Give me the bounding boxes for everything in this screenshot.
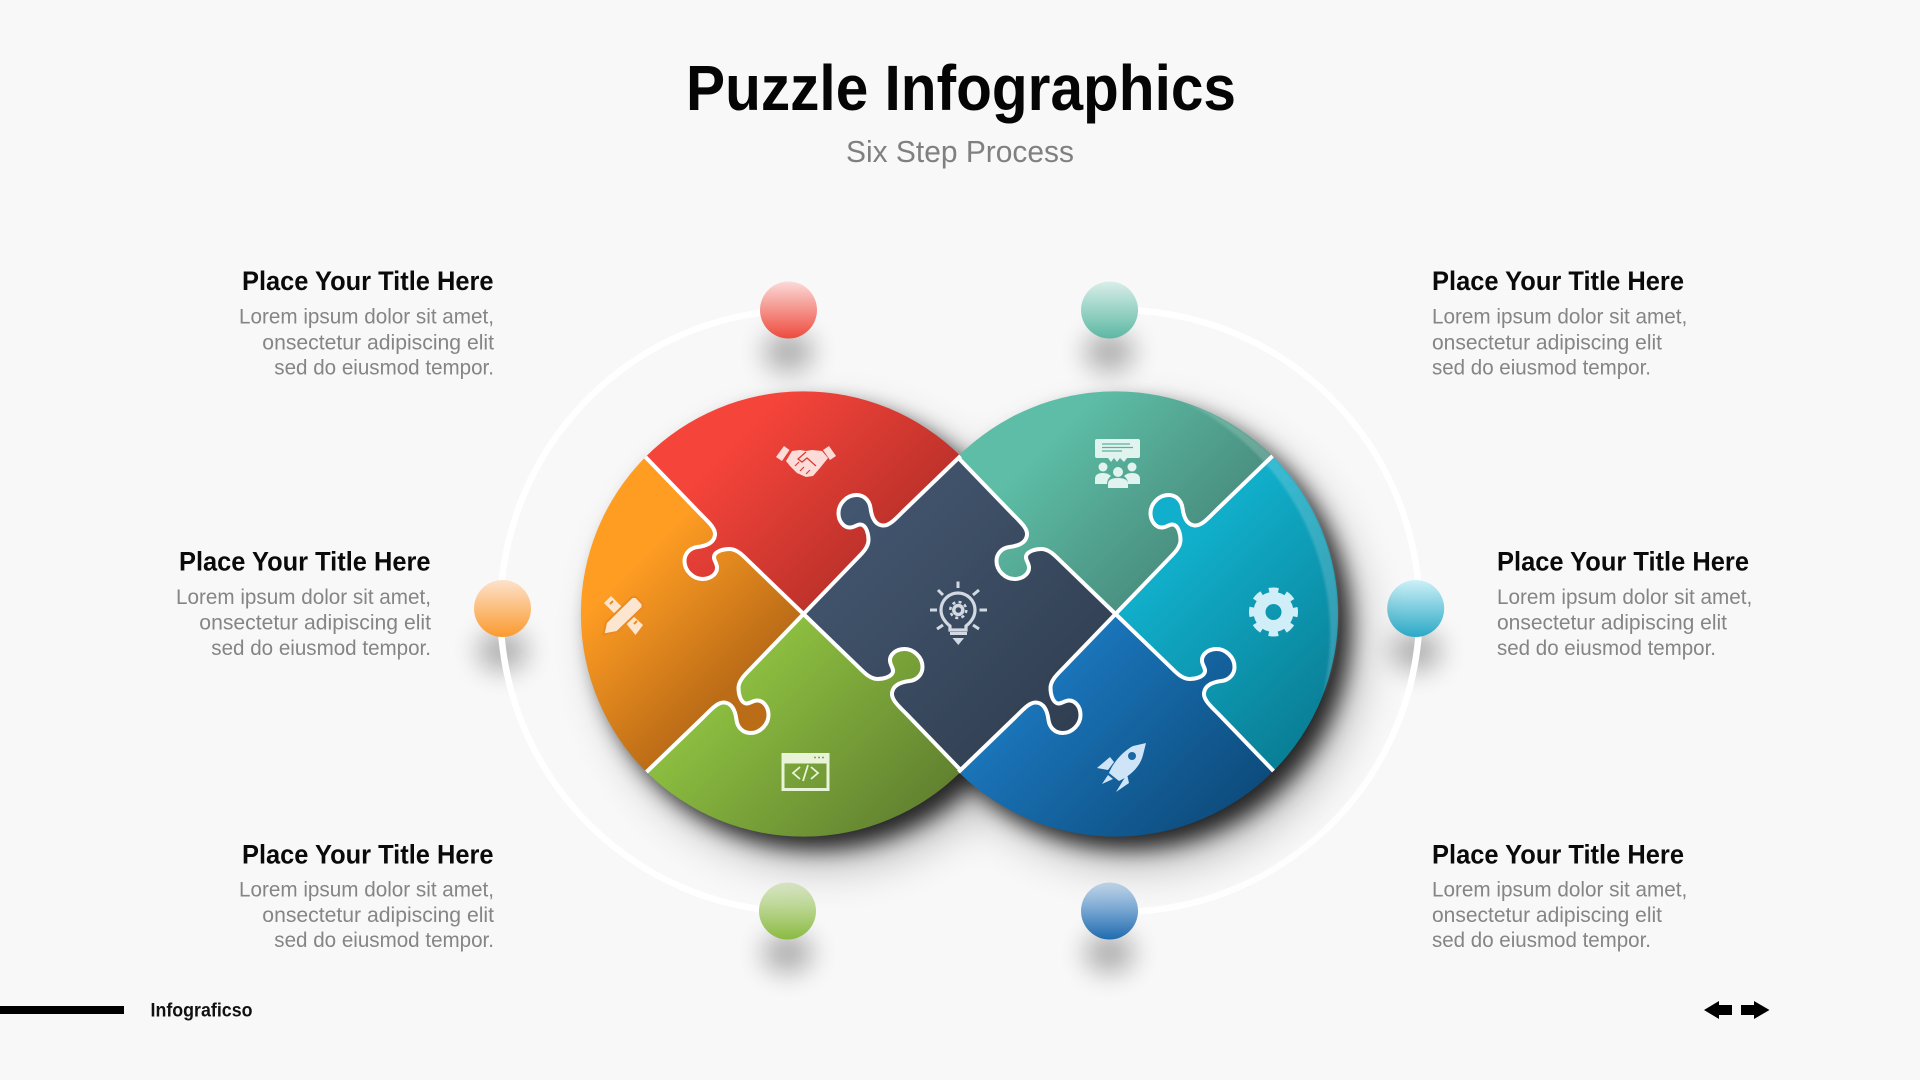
white ring right [1109, 310, 1420, 912]
puzzle: piece 6 blue [958, 614, 1274, 837]
text block: top right: Lorem ipsum dolor sit amet, [1432, 304, 1687, 328]
title: Puzzle Infographics [686, 52, 1236, 124]
text block: middle left: sed do eiusmod tempor. [211, 636, 431, 660]
dot shadows [478, 332, 1441, 973]
text block: top left: Lorem ipsum dolor sit amet, [239, 304, 494, 328]
puzzle white seams [646, 456, 1274, 772]
text block: bottom right: Place Your Title Here [1432, 839, 1684, 869]
icon: handshake [776, 446, 836, 477]
text block: top left: onsectetur adipiscing elit [262, 330, 494, 354]
text block: bottom left: onsectetur adipiscing elit [262, 903, 494, 927]
text block: bottom right: onsectetur adipiscing elit [1432, 903, 1662, 927]
puzzle: piece 2 orange [581, 457, 804, 772]
text block: top right: onsectetur adipiscing elit [1432, 330, 1662, 354]
dot: red [760, 282, 817, 338]
dot: blue [1081, 882, 1138, 940]
arrow: previous [1704, 1001, 1732, 1019]
puzzle: piece 5 cyan [1116, 456, 1338, 771]
rim highlight on right wheel [1184, 402, 1338, 698]
footer bar [0, 1006, 124, 1014]
icon: light bulb with gear [930, 582, 987, 645]
dot: cyan [1387, 580, 1444, 637]
text block: bottom right [1432, 839, 1687, 952]
text block: middle right: Lorem ipsum dolor sit amet, [1497, 585, 1752, 609]
text block: middle left: Place Your Title Here [179, 546, 430, 576]
text block: bottom left: Lorem ipsum dolor sit amet, [239, 878, 494, 902]
text block: middle right [1497, 546, 1752, 660]
icon: code window [783, 754, 828, 790]
text block: middle right: sed do eiusmod tempor. [1497, 636, 1716, 660]
puzzle wide soft shadow [603, 418, 1359, 862]
text block: bottom left: sed do eiusmod tempor. [274, 928, 494, 952]
text block: middle right: onsectetur adipiscing elit [1497, 610, 1727, 634]
icon: meeting presentation [1095, 439, 1140, 488]
puzzle: piece 4 teal [958, 391, 1272, 614]
text block: top left: Place Your Title Here [242, 266, 494, 296]
text block: top left [239, 266, 494, 380]
puzzle: piece 1 red [646, 391, 960, 614]
dot: teal [1081, 282, 1138, 338]
text block: top right [1432, 266, 1687, 380]
subtitle: Six Step Process [846, 134, 1074, 169]
text block: top left: sed do eiusmod tempor. [274, 356, 494, 380]
text block: middle left: Lorem ipsum dolor sit amet, [176, 585, 431, 609]
puzzle: piece 3 green [646, 614, 962, 837]
text block: bottom right: sed do eiusmod tempor. [1432, 928, 1651, 952]
text block: bottom right: Lorem ipsum dolor sit amet, [1432, 878, 1687, 902]
icon: gear [1252, 590, 1296, 634]
icon: rocket [1097, 743, 1146, 792]
dot: green [759, 882, 816, 940]
text block: top right: Place Your Title Here [1432, 266, 1684, 296]
footer brand: Infograficso [150, 1000, 252, 1022]
text block: middle left [176, 546, 431, 660]
text block: bottom left [239, 839, 494, 952]
text block: middle right: Place Your Title Here [1497, 546, 1749, 576]
white ring left [500, 310, 788, 912]
icon: pencil and ruler [604, 596, 643, 635]
dot: orange [474, 580, 531, 637]
text block: bottom left: Place Your Title Here [242, 839, 494, 869]
puzzle: centre navy piece [804, 457, 1116, 771]
text block: middle left: onsectetur adipiscing elit [199, 610, 431, 634]
text block: top right: sed do eiusmod tempor. [1432, 356, 1651, 380]
arrow: next [1741, 1001, 1770, 1019]
puzzle drop shadow [594, 405, 1350, 849]
